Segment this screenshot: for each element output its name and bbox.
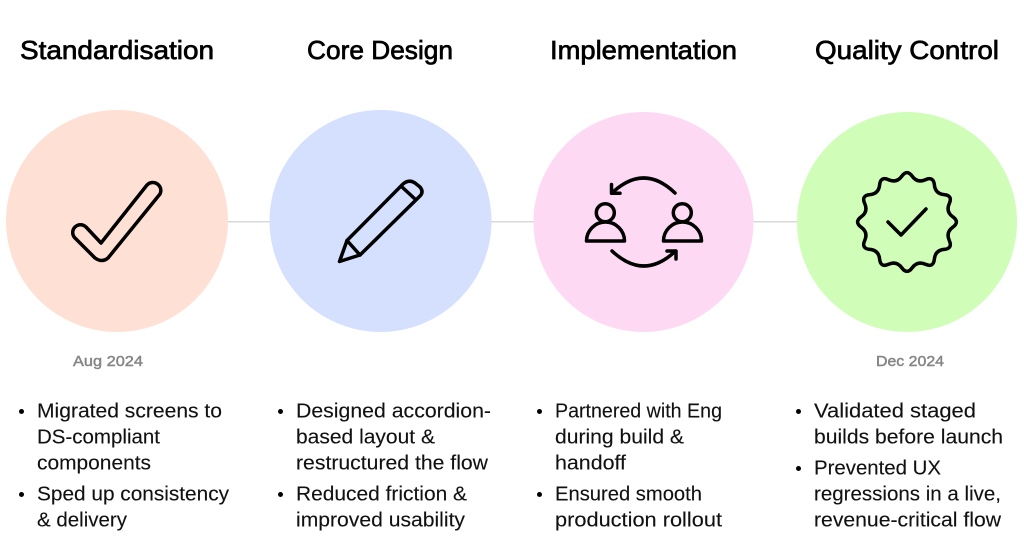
panel: Standardisation (6, 35, 229, 532)
circle: blue (270, 110, 492, 332)
circle: pink (534, 112, 754, 332)
bullet list: Quality Control: builds before launch (814, 426, 1003, 448)
bullet list: Core Design: Designed accordion- (296, 400, 491, 422)
bullet list: Implementation: during build & (555, 426, 685, 448)
bullet list: Implementation (537, 400, 722, 532)
bullet list: Implementation: handoff (555, 452, 626, 474)
bullet list: Core Design: Reduced friction & (296, 484, 468, 506)
heading: Implementation: Implementation (550, 35, 737, 65)
bullet list: Standardisation: & delivery (37, 510, 127, 532)
date: Aug 2024: Aug 2024 (73, 354, 143, 370)
panel: Quality Control (796, 35, 1017, 532)
heading: Standardisation: Standardisation (20, 35, 214, 65)
heading: Core Design: Core Design (307, 35, 453, 65)
bullet list: Implementation: Ensured smooth (555, 484, 702, 506)
heading: Quality Control: Quality Control (815, 35, 999, 65)
bullet list: Quality Control (796, 400, 1003, 532)
bullet list: Quality Control: regressions in a live, (814, 484, 1001, 506)
panel: Core Design (270, 35, 492, 532)
bullet list: Core Design: based layout & (296, 426, 436, 448)
icon: verified badge (858, 173, 956, 271)
icon: check mark (73, 183, 161, 260)
bullet list: Standardisation: Migrated screens to (37, 400, 222, 422)
bullet list: Quality Control: Prevented UX (814, 458, 941, 480)
circle: green (797, 112, 1017, 332)
icon: people exchanging (586, 178, 702, 266)
bullet list: Quality Control: revenue-critical flow (814, 510, 1002, 532)
bullet list: Standardisation: components (37, 452, 151, 474)
bullet list: Standardisation: DS-compliant (37, 426, 160, 448)
bullet list: Quality Control: Validated staged (814, 400, 976, 422)
date: Dec 2024: Dec 2024 (876, 354, 944, 370)
bullet list: Standardisation: Sped up consistency (37, 484, 229, 506)
bullet list: Core Design (278, 400, 491, 532)
bullet list: Standardisation (19, 400, 229, 532)
icon: pencil (340, 181, 422, 262)
bullet list: Core Design: improved usability (296, 510, 465, 532)
bullet list: Implementation: production rollout (555, 510, 722, 532)
bullet list: Implementation: Partnered with Eng (555, 400, 722, 422)
bullet list: Core Design: restructured the flow (296, 452, 489, 474)
panel: Implementation (534, 35, 754, 532)
circle: peach (6, 110, 228, 332)
